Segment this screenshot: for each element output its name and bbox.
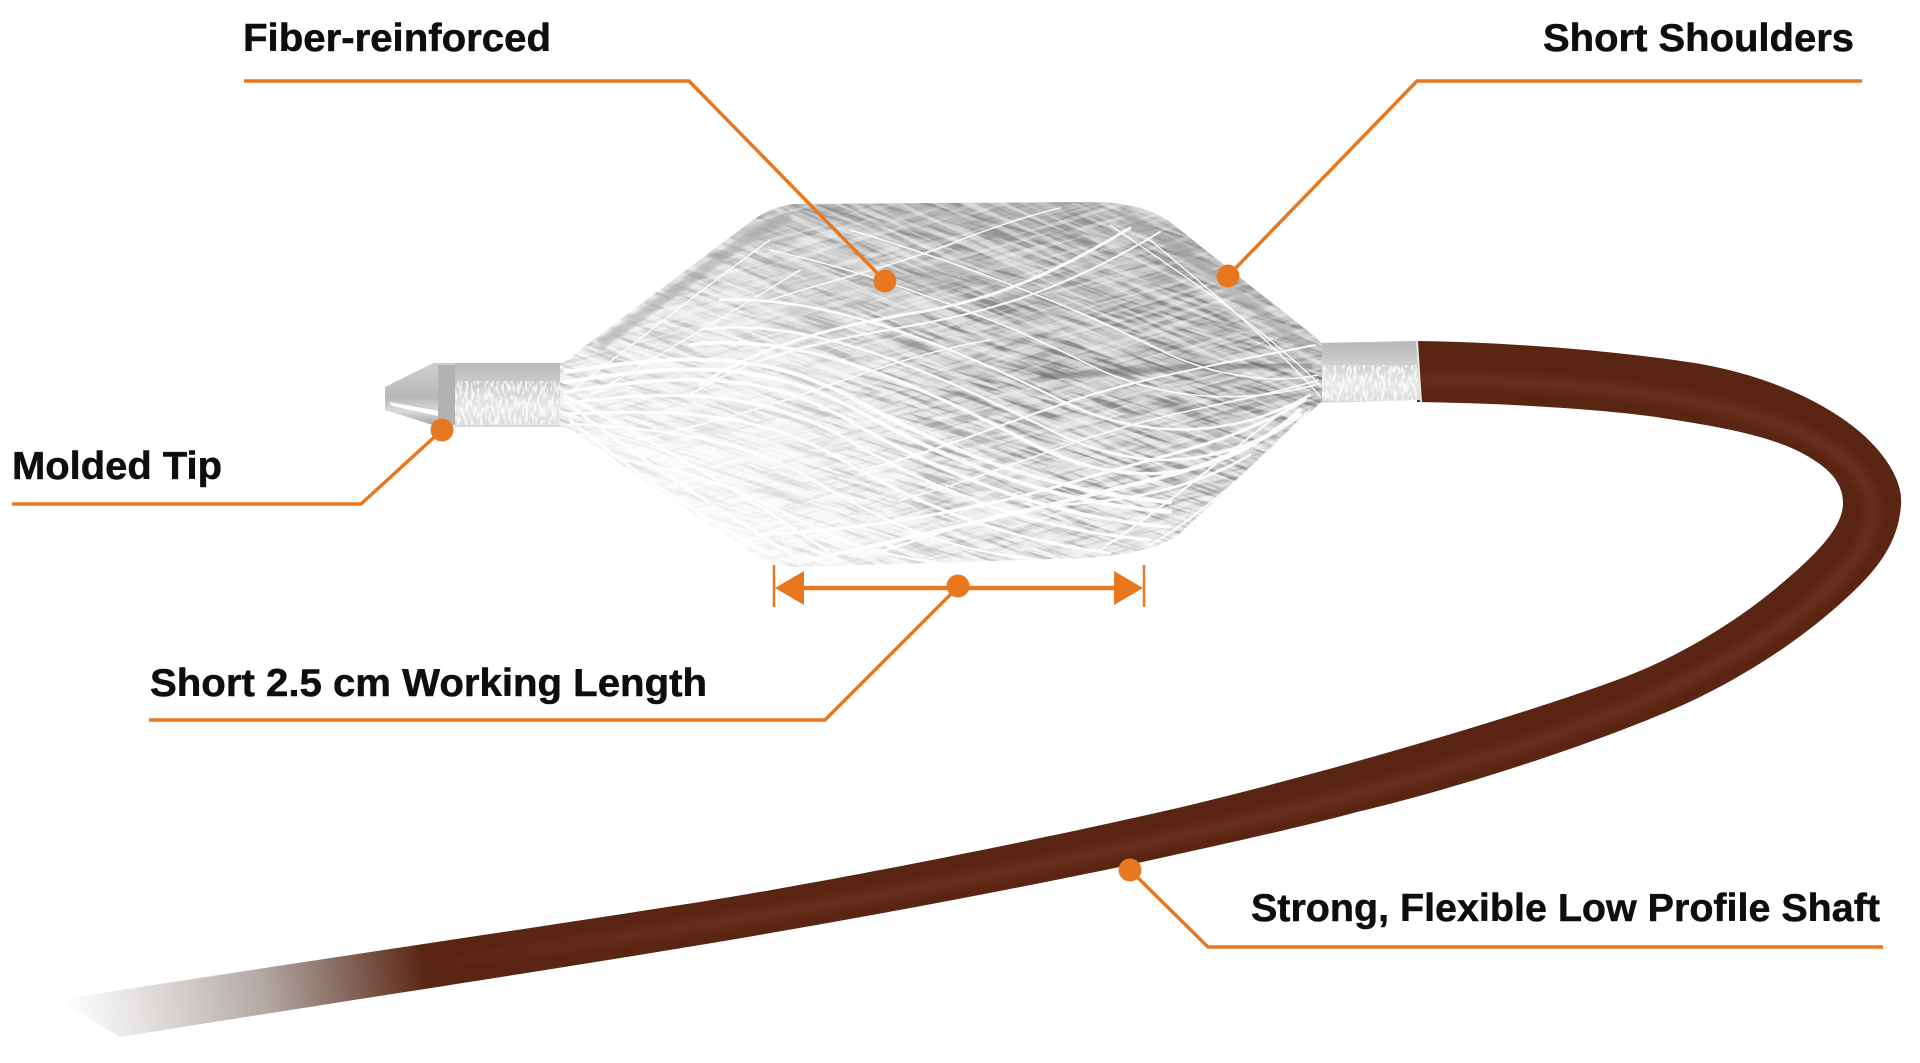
shaft end collar highlight [1417,341,1421,402]
callout: Strong, Flexible Low Profile Shaft [1118,858,1883,947]
left balloon neck [455,363,567,427]
label: Fiber-reinforced: Fiber-reinforced [243,17,551,60]
marker dot: Fiber-reinforced [874,270,896,292]
leader line: Short Shoulders [1227,81,1862,277]
label: Short 2.5 cm Working Length: Short 2.5 cm Working Length [150,662,707,705]
marker dot: Shaft [1118,858,1142,882]
label: Strong, Flexible Low Profile Shaft: Strong, Flexible Low Profile Shaft [1251,887,1880,930]
callout: Molded Tip [12,418,454,504]
callout: Short Shoulders [1216,17,1862,288]
leader line: Working Length [149,587,958,720]
label: Short Shoulders: Short Shoulders [1543,17,1854,60]
leader line: Molded Tip [12,430,442,504]
leader line: Shaft [1130,870,1883,947]
catheter shaft [58,341,1901,1037]
dimension arrow: Working Length [774,565,1144,607]
leader line: Fiber-reinforced [244,81,885,281]
marker dot: Working Length [946,574,970,598]
fiber-reinforced balloon body [560,202,1322,567]
callout: Short 2.5 cm Working Length [149,565,1144,720]
callout: Fiber-reinforced [243,17,896,292]
label: Molded Tip: Molded Tip [12,445,222,488]
marker dot: Molded Tip [430,418,454,442]
right balloon neck [1315,341,1421,403]
balloon tip [385,363,456,425]
marker dot: Short Shoulders [1216,264,1240,288]
